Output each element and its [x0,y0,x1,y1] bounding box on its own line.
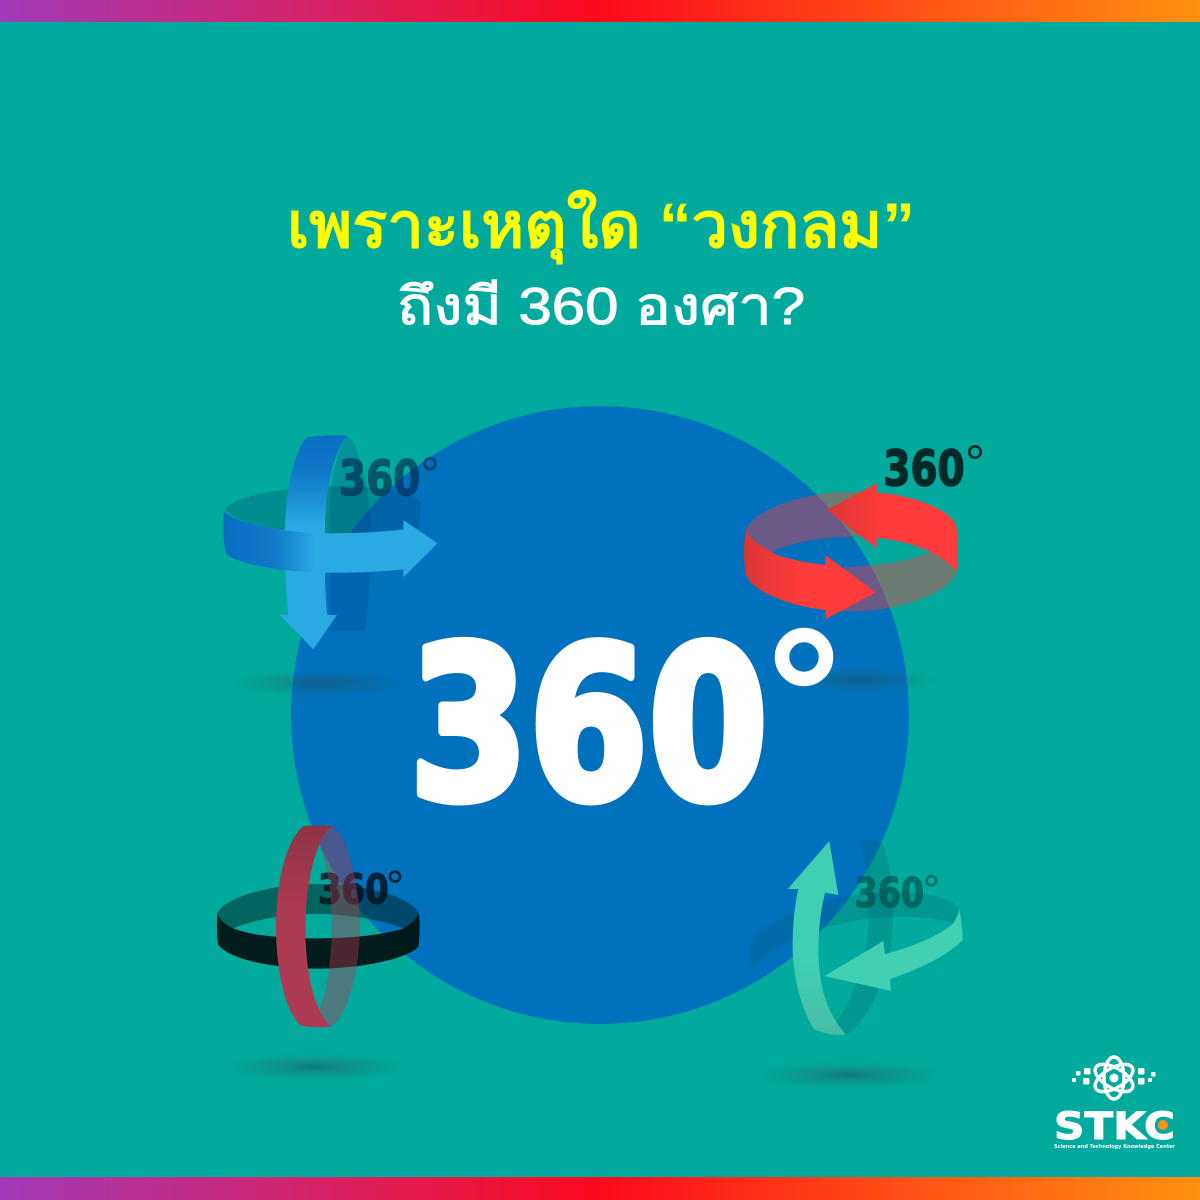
icon: black and crimson rings: 360 [318,866,389,914]
icon: blue crossed arrows: 360 [339,451,420,507]
title: line two: ถึงมี 360 องศา? [397,278,805,336]
icon: atom mark [1072,1057,1156,1099]
top gradient bar [0,0,1200,22]
bottom gradient bar [0,1177,1200,1200]
icon: black and crimson rings [217,825,420,1027]
icon: mint green arrows: 360 [855,869,924,917]
title: line one: เพราะเหตุใด “วงกลม” [287,189,915,265]
central 360 degree figure: 360 [409,602,768,848]
STKC logo: Science and Technology Knowledge Center [1054,1144,1175,1150]
icon: red circular arrows: 360 [883,439,965,497]
icon: red circular arrows [744,439,981,619]
icon: blue crossed arrows [223,435,438,649]
main blue circle [291,406,909,1024]
shadows beneath the icons [223,667,946,1089]
STKC logo [1054,1057,1175,1150]
icon: mint green arrows [749,840,963,1035]
STKC logo: STKC [1054,1105,1175,1148]
